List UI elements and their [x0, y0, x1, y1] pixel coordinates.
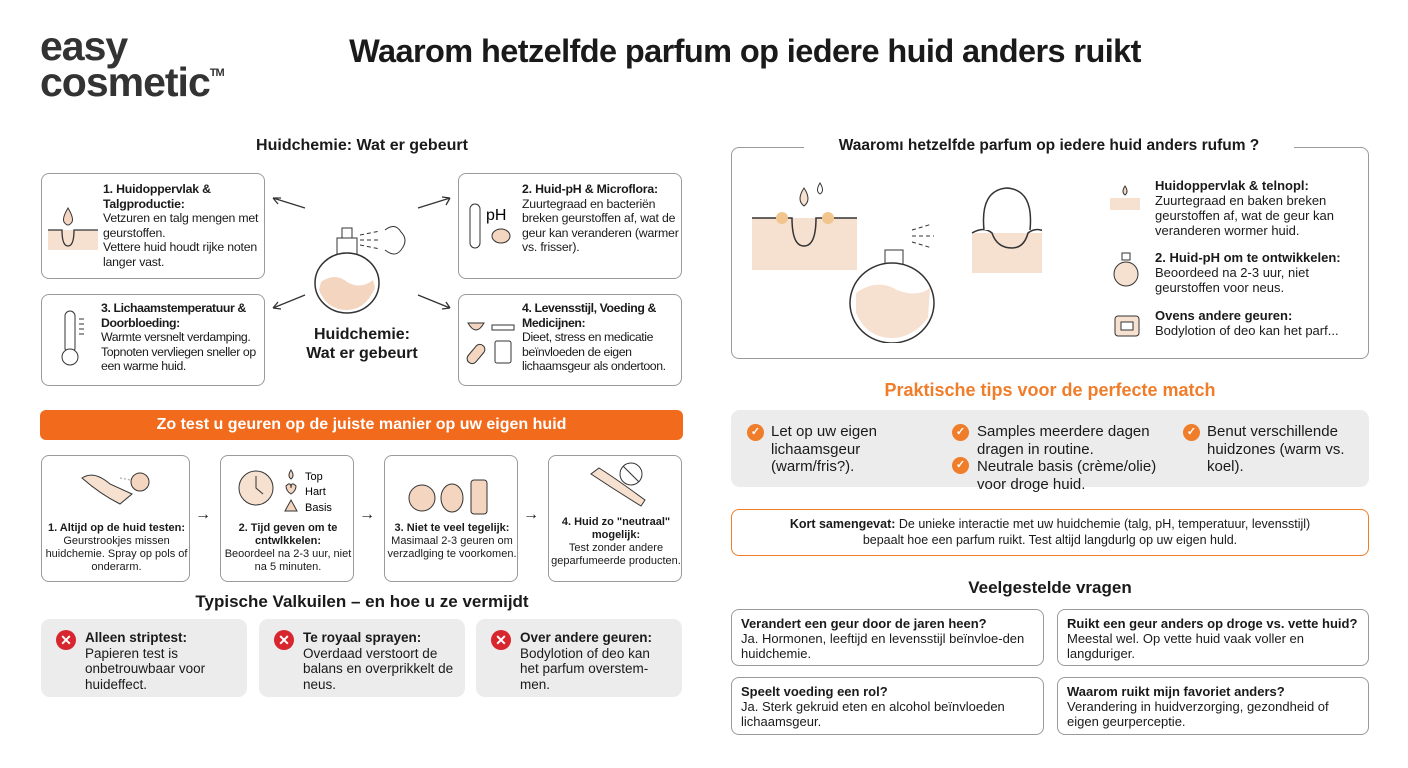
faq 3: Ja. Sterk gekruid eten en alcohol beïnvloeden lichaamsgeur.	[741, 699, 1005, 729]
faq 3: Speelt voeding een rol?	[741, 684, 888, 699]
text: center caption: Wat er gebeurt	[306, 345, 418, 362]
banner: orange test heading: Zo test u geuren op de juiste manier op uw eigen huid	[157, 416, 566, 433]
icon: hand spray	[81, 472, 150, 505]
tip 4: ✓	[1187, 426, 1196, 438]
step 2: Beoordeel na 2-3 uur, niet na 5 minuten.	[225, 548, 351, 573]
panel: box 4: Dieet, stress en medicatie beïnvloeden de eigen lichaamsgeur als ondertoon.	[522, 330, 666, 373]
panel: box 1: Vettere huid houdt rijke noten langer vast.	[103, 240, 257, 268]
tips box: Let op uw eigen lichaamsgeur (warm/fris?).	[771, 423, 877, 475]
icon: arm no perfume	[590, 462, 646, 507]
icon: clock notes: Hart	[305, 486, 326, 498]
arrow: →	[523, 506, 539, 523]
step 1	[41, 455, 190, 582]
text: center caption: Huidchemie:	[314, 326, 410, 343]
pitfall 2: Te royaal sprayen:	[303, 630, 421, 645]
summary callout: Kort samengevat: De unieke interactie met uw huidchemie (talg, pH, temperatuur, levensstijl)	[790, 517, 1310, 531]
panel: box 3: 3. Lichaamstemperatuur & Doorbloeding:	[101, 301, 246, 330]
icon: x	[491, 630, 511, 650]
text: center caption	[306, 326, 418, 362]
icon: x: ✕	[278, 632, 290, 648]
panel title: Waaromı hetzelfde parfum op iedere huid anders rufum ?	[839, 137, 1259, 154]
faq 2: Ruikt een geur anders op droge vs. vette huid?	[1067, 616, 1357, 631]
tip 1: ✓	[751, 426, 760, 438]
panel: box 2	[458, 173, 682, 279]
step 3: 3. Niet te veel tegelijk:	[395, 522, 509, 534]
tips box: Benut verschillende huidzones (warm vs. koel).	[1207, 423, 1345, 475]
icon: ph: pH	[486, 207, 506, 224]
pitfall 3: Over andere geuren:	[520, 630, 652, 645]
pitfall 3: Bodylotion of deo kan het parfum overstem-men.	[520, 646, 650, 692]
pitfall 2	[259, 619, 465, 697]
step 2: 2. Tijd geven om te cntwlkkelen:	[239, 522, 337, 547]
faq 3	[731, 677, 1044, 735]
panel: right illustration: Beoordeed na 2-3 uur, niet geurstoffen voor neus.	[1155, 265, 1309, 295]
step 2	[220, 455, 354, 582]
icon: clock notes	[238, 469, 332, 514]
faq 4: Verandering in huidverzorging, gezondheid of eigen geurperceptie.	[1067, 699, 1329, 729]
logo: easy	[40, 23, 127, 69]
tips box	[731, 410, 1369, 487]
icon: bottles	[408, 480, 488, 514]
tip 2: ✓	[956, 426, 965, 438]
arrow: →	[195, 506, 211, 523]
icon: skin drop	[48, 207, 98, 250]
pitfall 1: Papieren test is onbetrouwbaar voor huideffect.	[85, 646, 205, 692]
step 3: Masimaal 2-3 geuren om verzadlging te voorkomen.	[387, 535, 516, 560]
panel: box 1	[41, 173, 265, 279]
panel: box 4	[458, 294, 682, 386]
tip 4	[1183, 424, 1200, 441]
item 3	[1114, 308, 1339, 338]
panel: box 1: Vetzuren en talg mengen met geurstoffen.	[103, 211, 258, 240]
faq 1: Verandert een geur door de jaren heen?	[741, 616, 987, 631]
faq 2	[1057, 609, 1369, 666]
faq 2: Meestal wel. Op vette huid vaak voller en langduriger.	[1067, 631, 1304, 661]
panel: right illustration: Bodylotion of deo kan het parf...	[1155, 323, 1339, 338]
panel: box 3	[41, 294, 265, 386]
panel: right illustration: Zuurtegraad en baken breken geurstoffen af, wat de geur kan veranderen wormer huid.	[1155, 193, 1334, 238]
faq 4	[1057, 677, 1369, 735]
panel: box 1: 1. Huidoppervlak & Talgproductie:	[103, 182, 211, 210]
icon: lifestyle	[466, 322, 514, 364]
tip 2	[952, 424, 969, 441]
step 1: 1. Altijd op de huid testen: Geurstrookjes missen huidchemie. Spray op pols of onderarm.	[46, 522, 187, 573]
step 4: Test zonder andere geparfumeerde producten.	[551, 542, 681, 567]
icon: central bottle with arrows	[272, 196, 450, 314]
pitfall 3	[476, 619, 682, 697]
heading: praktische tips: Praktische tips voor de perfecte match	[884, 380, 1216, 400]
icon: x	[56, 630, 76, 650]
step 4: 4. Huid zo "neutraal" mogelijk:	[562, 516, 670, 541]
icon: x: ✕	[495, 632, 507, 648]
arrow: →	[359, 506, 375, 523]
panel: box 3: Warmte versnelt verdamping. Topnoten vervliegen sneller op een warme huid.	[101, 330, 256, 373]
summary callout: bepaalt hoe een parfum ruikt. Test altijd langdurlg op uw eigen huld.	[863, 533, 1237, 547]
pitfall 1	[41, 619, 247, 697]
step 3	[384, 455, 518, 582]
icon: ph	[470, 204, 510, 248]
icon: thermometer	[62, 310, 84, 366]
panel: right illustration: Ovens andere geuren:	[1155, 308, 1292, 323]
pitfall 1: Alleen striptest:	[85, 630, 187, 645]
icon: x: ✕	[60, 632, 72, 648]
panel: box 2: Zuurtegraad en bacteriën breken geurstoffen af, wat de geur kan veranderen (warmer vs. frisser).	[522, 196, 679, 254]
logo	[40, 23, 224, 105]
faq 1	[731, 609, 1044, 666]
tips box: Neutrale basis (crème/olie) voor droge huid.	[977, 458, 1156, 492]
summary callout	[731, 509, 1369, 556]
heading: valkuilen: Typische Valkuilen – en hoe u ze vermijdt	[195, 592, 529, 611]
tip 3: ✓	[956, 459, 965, 471]
tip 3	[952, 457, 969, 474]
panel: box 4: 4. Levensstijl, Voeding & Medicijnen:	[522, 301, 656, 330]
tips box: Samples meerdere dagen dragen in routine.	[977, 423, 1150, 458]
icon: clock notes: Basis	[305, 502, 332, 514]
faq 1: Ja. Hormonen, leeftijd en levensstijl beïnvloe-den huidchemie.	[741, 631, 1024, 661]
logo: cosmeticTM	[40, 59, 224, 105]
panel: right illustration	[731, 147, 1369, 359]
icon: x	[274, 630, 294, 650]
step 4	[548, 455, 682, 582]
panel: right illustration: Huidoppervlak & telnopl:	[1155, 178, 1309, 193]
faq 4: Waarom ruikt mijn favoriet anders?	[1067, 684, 1285, 699]
pitfall 2: Overdaad verstoort de balans en overprikkelt de neus.	[303, 646, 453, 692]
panel: box 2: 2. Huid-pH & Microflora:	[522, 182, 658, 196]
banner: orange test heading	[40, 410, 683, 440]
icon: clock notes: Top	[305, 471, 323, 483]
item 2	[1114, 250, 1341, 295]
heading: huidchemie: Huidchemie: Wat er gebeurt	[256, 137, 468, 154]
heading: faq: Veelgestelde vragen	[968, 578, 1132, 597]
panel: right illustration: 2. Huid-pH om te ontwikkelen:	[1155, 250, 1341, 265]
item 1	[1110, 178, 1334, 238]
icon: skin illustration	[752, 182, 1042, 343]
title: Waarom hetzelfde parfum op iedere huid anders ruikt	[349, 33, 1141, 69]
tip 1	[747, 424, 764, 441]
